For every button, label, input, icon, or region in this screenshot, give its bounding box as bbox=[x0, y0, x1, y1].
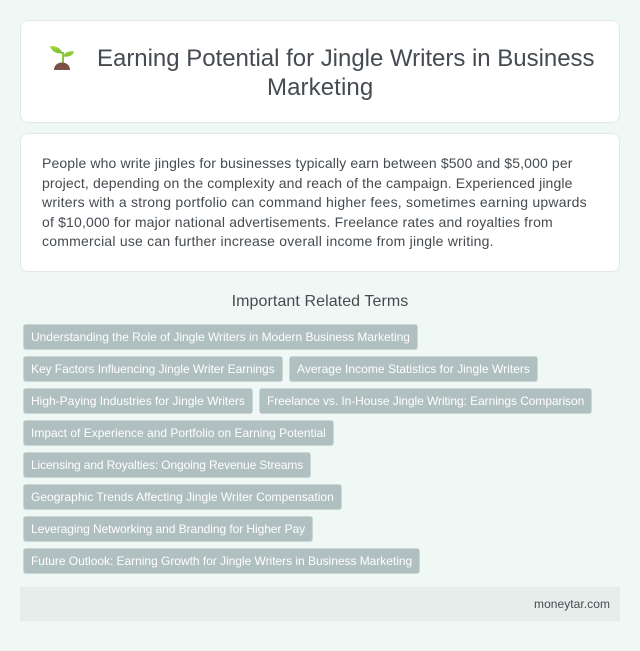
tag: Geographic Trends Affecting Jingle Writer Compensation bbox=[31, 490, 334, 504]
intro paragraph: writers with a strong portfolio can command higher fees, sometimes earning upwards bbox=[42, 194, 587, 210]
tag: Impact of Experience and Portfolio on Earning Potential bbox=[31, 426, 326, 440]
tag: Leveraging Networking and Branding for Higher Pay bbox=[31, 522, 305, 536]
tag bbox=[289, 356, 538, 382]
tag bbox=[23, 420, 334, 446]
intro paragraph bbox=[42, 155, 587, 249]
tags: related terms bbox=[23, 324, 592, 574]
tag: Licensing and Royalties: Ongoing Revenue Streams bbox=[31, 458, 303, 472]
title bbox=[97, 45, 594, 101]
tag bbox=[23, 388, 253, 414]
tag bbox=[23, 356, 283, 382]
intro text panel bbox=[20, 133, 620, 272]
footer source: moneytar.com bbox=[534, 597, 610, 611]
header panel bbox=[20, 20, 620, 123]
tag bbox=[23, 452, 311, 478]
intro paragraph: project, depending on the complexity and reach of the campaign. Experienced jingle bbox=[42, 175, 573, 191]
header panel: Earning Potential for Jingle Writers in Business bbox=[97, 45, 594, 72]
intro paragraph: People who write jingles for businesses typically earn between $500 and $5,000 per bbox=[42, 155, 573, 171]
related terms heading: Important Related Terms bbox=[232, 293, 408, 310]
intro paragraph: commercial use can further increase overall income from jingle writing. bbox=[42, 233, 494, 249]
tag: Future Outlook: Earning Growth for Jingle Writers in Business Marketing bbox=[31, 554, 412, 568]
footer bar bbox=[20, 587, 620, 621]
tag bbox=[23, 324, 418, 350]
tag: Understanding the Role of Jingle Writers in Modern Business Marketing bbox=[31, 330, 410, 344]
intro paragraph: of $10,000 for major national advertisements. Freelance rates and royalties from bbox=[42, 214, 553, 230]
header panel: Marketing bbox=[267, 74, 373, 101]
icon: seedling bbox=[50, 46, 74, 70]
tag: Average Income Statistics for Jingle Writers bbox=[297, 362, 530, 376]
tag: High-Paying Industries for Jingle Writers bbox=[31, 394, 245, 408]
tag bbox=[23, 484, 342, 510]
tag bbox=[259, 388, 592, 414]
tag bbox=[23, 548, 420, 574]
tag: Freelance vs. In-House Jingle Writing: Earnings Comparison bbox=[267, 394, 584, 408]
tag bbox=[23, 516, 313, 542]
tag: Key Factors Influencing Jingle Writer Earnings bbox=[31, 362, 275, 376]
